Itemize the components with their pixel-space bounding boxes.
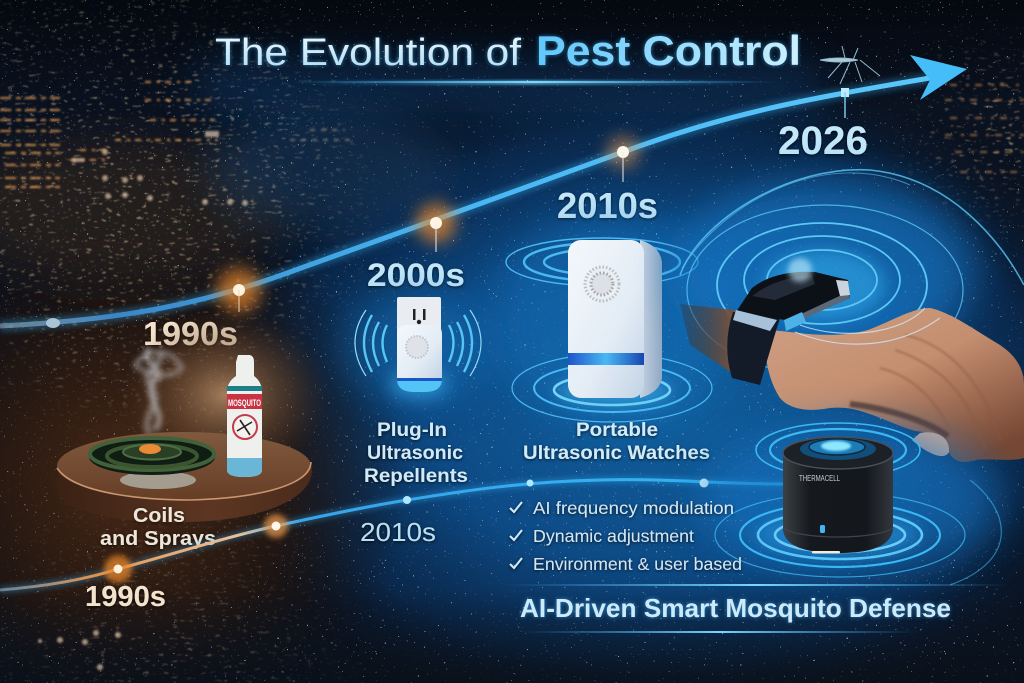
panel: portable ultrasonic watches: [495, 215, 725, 464]
title: Pest Control: [536, 27, 801, 74]
ripple rings: [715, 423, 1001, 585]
label: portable ultrasonic watches: [523, 420, 710, 464]
lower timeline: [0, 478, 785, 590]
bokeh lights: [38, 131, 248, 670]
heading: AI-driven smart mosquito defense: AI-Driven Smart Mosquito Defense: [520, 593, 951, 623]
feature: environment and user based: Environment & user based: [533, 554, 742, 574]
panel: smart defense device: [700, 423, 1001, 585]
year label: 2026: 2026: [778, 119, 868, 163]
title: The Evolution of: [215, 32, 521, 74]
icon: smart watch: [727, 258, 850, 385]
hand: [766, 308, 1024, 462]
panel: smart wristband on hand: [675, 170, 1024, 462]
icon: mosquito coil: [89, 438, 215, 489]
label: plug-in ultrasonic repellents: Ultrasonic: [367, 443, 463, 464]
node: 2000s: [416, 203, 456, 252]
node: lower mid: [526, 480, 534, 486]
node: 1990s: [217, 268, 261, 312]
wall plate: [397, 297, 441, 337]
label: portable ultrasonic watches: Ultrasonic Watches: [523, 443, 710, 464]
sound waves: [355, 310, 481, 376]
year label: 2000s: 2000s: [367, 257, 465, 293]
glow and ripple rings: [675, 170, 1024, 375]
wrist rings: [795, 308, 940, 344]
warm glow: [120, 310, 330, 480]
label: plug-in ultrasonic repellents: [364, 420, 468, 487]
title: [215, 27, 801, 85]
year label: 1990s: 1990s: [143, 315, 238, 352]
node: lower 1990s: [104, 555, 132, 583]
year label: lower 2010s: 2010s: [360, 517, 436, 547]
node: lower 2026: [700, 478, 708, 488]
cylinder device: THERMACELL: [799, 474, 840, 483]
ripple rings: [506, 238, 712, 422]
stone pedestal: [57, 432, 312, 523]
label: coils and sprays: and Sprays: [100, 528, 216, 550]
device body: [397, 325, 442, 392]
forearm: [680, 304, 735, 375]
node: 2010s: [607, 136, 639, 182]
node: 2026: [841, 88, 849, 118]
year label: 2010s: 2010s: [557, 185, 658, 226]
smoke: [135, 348, 182, 435]
feature list: [510, 498, 742, 574]
panel: coils and sprays: [57, 310, 330, 550]
node: lower 2010s: [403, 496, 411, 504]
arrowhead: [910, 55, 967, 100]
label: coils and sprays: Coils: [133, 505, 185, 527]
device body: [568, 240, 662, 398]
label: coils and sprays: [100, 505, 216, 550]
node: 1990s start: [46, 318, 60, 328]
icon: spray bottle: [227, 355, 262, 477]
year label: lower 1990s: 1990s: [85, 581, 166, 613]
label: portable ultrasonic watches: Portable: [576, 420, 658, 441]
icon: mosquito: [820, 46, 880, 84]
upper timeline arrow: [0, 55, 967, 328]
label: plug-in ultrasonic repellents: Plug-In: [377, 420, 447, 441]
cylinder device: [756, 437, 920, 559]
panel: plug-in ultrasonic repellents: [343, 290, 493, 487]
node: lower 2000s: [264, 514, 288, 538]
feature: dynamic adjustment: Dynamic adjustment: [533, 526, 694, 546]
label: plug-in ultrasonic repellents: Repellents: [364, 466, 468, 487]
icon: spray bottle: MOSQUITO: [228, 398, 261, 409]
feature: AI frequency modulation: AI frequency modulation: [533, 498, 734, 518]
